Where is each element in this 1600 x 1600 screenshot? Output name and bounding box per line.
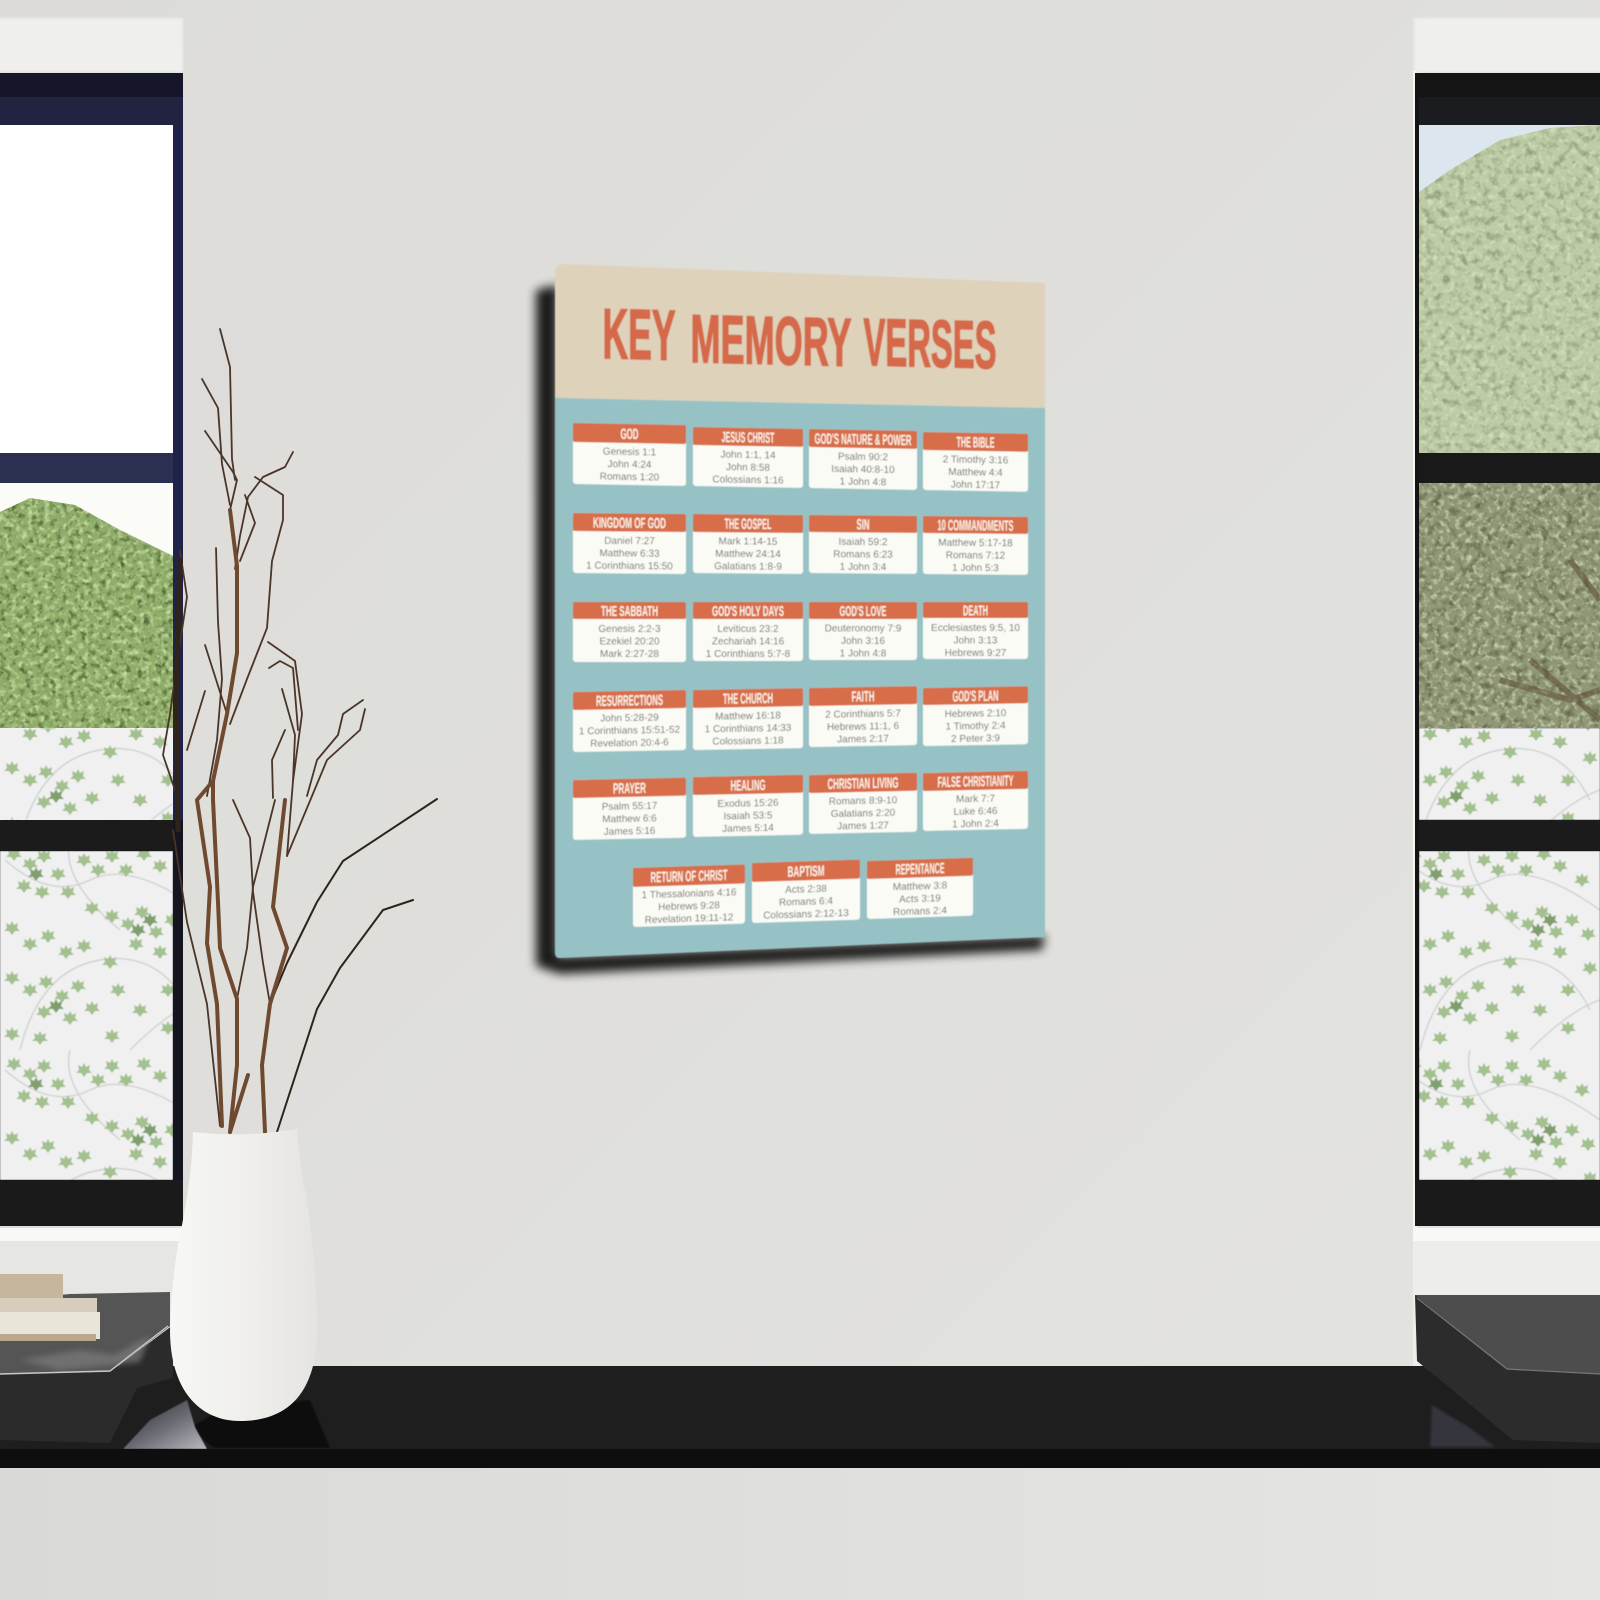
card: Jesus Christ (693, 427, 803, 488)
verses: The Sabbath: Mark 2:27-28 (600, 649, 659, 660)
heading: God's Nature and Power: GOD'S NATURE & POWER (814, 431, 912, 449)
verses: Kingdom of God: Daniel 7:27 (604, 536, 655, 547)
verses: The Church: Colossians 1:18 (712, 735, 784, 748)
verses: Prayer: Matthew 6:6 (602, 813, 657, 825)
verses: God's Nature and Power: Psalm 90:2 (838, 452, 888, 463)
verses: God: Genesis 1:1 (603, 447, 657, 458)
card: Return of Christ (633, 864, 745, 927)
card: Sin (809, 515, 917, 574)
verses: Repentance: Acts 3:19 (899, 893, 941, 905)
verses: 10 Commandments: Romans 7:12 (946, 550, 1006, 562)
verses: Resurrections: John 5:28-29 (600, 712, 659, 725)
heading: Healing: HEALING (730, 777, 766, 795)
left window (0, 18, 183, 1366)
right lower tree (1419, 483, 1600, 728)
verses: Return of Christ: 1 Thessalonians 4:16 (642, 887, 737, 901)
card: Repentance (867, 858, 973, 919)
card: False Christianity (923, 771, 1028, 831)
verses: Healing: Exodus 15:26 (717, 798, 779, 810)
verses: Death: Hebrews 9:27 (945, 648, 1007, 659)
verses: Return of Christ: Hebrews 9:28 (658, 900, 720, 913)
card: God (573, 423, 686, 486)
verses: False Christianity: Luke 6:46 (954, 806, 998, 818)
verses: God's Plan: Hebrews 2:10 (945, 708, 1007, 720)
verses: The Sabbath: Ezekiel 20:20 (599, 636, 660, 648)
card: Baptism (752, 860, 860, 923)
verses: False Christianity: Mark 7:7 (956, 793, 995, 805)
poster teal body (555, 398, 1045, 958)
white vase (170, 1129, 317, 1421)
canvas poster (555, 264, 1045, 958)
heading: Sin: SIN (856, 516, 870, 534)
verses: Faith: James 2:17 (837, 734, 889, 746)
verses: Baptism: Acts 2:38 (785, 884, 827, 896)
verses: Christian Living: Galatians 2:20 (831, 808, 896, 820)
card: The Gospel (693, 514, 803, 574)
card: God's Holy Days (693, 602, 803, 661)
heading: The Church: THE CHURCH (723, 690, 773, 708)
verses: Kingdom of God: 1 Corinthians 15:50 (586, 561, 673, 572)
right window (1413, 18, 1600, 1366)
verses: False Christianity: 1 John 2:4 (952, 818, 999, 830)
floor wall below shelf (0, 1468, 1600, 1600)
poster beige header band (555, 264, 1045, 408)
heading: The Sabbath: THE SABBATH (601, 603, 658, 620)
verses: 10 Commandments: 1 John 5:3 (952, 563, 999, 574)
heading: Kingdom of God: KINGDOM OF GOD (593, 515, 666, 532)
verses: Repentance: Romans 2:4 (893, 905, 947, 918)
verses: The Sabbath: Genesis 2:2-3 (598, 624, 661, 635)
verses: 10 Commandments: Matthew 5:17-18 (938, 538, 1013, 549)
verses: Healing: Isaiah 53:5 (724, 810, 773, 822)
title: MEMORY (690, 301, 852, 381)
left ivy upper strip (0, 728, 173, 820)
verses: God's Love: Deuteronomy 7:9 (825, 624, 902, 634)
verses: The Gospel: Matthew 24:14 (715, 549, 781, 560)
verses: Return of Christ: Revelation 19:11-12 (645, 912, 734, 926)
card: Faith (809, 686, 917, 747)
verses: God's Holy Days: Zechariah 14:16 (712, 636, 785, 648)
card: The Gospel: THE GOSPEL (725, 516, 771, 533)
card: The Bible: THE BIBLE (956, 434, 994, 452)
verses: The Bible: John 17:17 (951, 479, 1001, 491)
verses: God's Nature and Power: Isaiah 40:8-10 (831, 464, 895, 476)
card: Kingdom of God (573, 513, 686, 574)
verses: Jesus Christ: Colossians 1:16 (712, 474, 784, 487)
heading: Resurrections: RESURRECTIONS (596, 692, 663, 710)
title: KEY (602, 295, 676, 376)
card: God's Plan (923, 686, 1028, 746)
heading: Return of Christ: RETURN OF CHRIST (650, 867, 727, 886)
verses: The Gospel: Galatians 1:8-9 (714, 561, 782, 573)
right ivy upper strip (1419, 728, 1600, 820)
verses: Resurrections: 1 Corinthians 15:51-52 (579, 725, 681, 737)
card: Christian Living (809, 773, 917, 834)
verses: Jesus Christ: John 1:1, 14 (720, 449, 776, 461)
verses: The Church: Matthew 16:18 (715, 710, 781, 723)
verses: Healing: James 5:14 (722, 823, 774, 835)
verses: Christian Living: Romans 8:9-10 (829, 795, 898, 808)
heading: Faith: FAITH (851, 688, 874, 706)
right upper tree (1419, 125, 1600, 455)
verses: Prayer: Psalm 55:17 (602, 801, 658, 813)
heading: Christian Living: CHRISTIAN LIVING (828, 775, 898, 793)
heading: Prayer: PRAYER (613, 780, 646, 798)
verses: Faith: 2 Corinthians 5:7 (825, 708, 901, 721)
shelf (0, 1366, 1600, 1468)
right ivy lower pane (1419, 851, 1600, 1180)
verses: The Gospel: Mark 1:14-15 (719, 536, 778, 548)
card: God's Plan: GOD'S PLAN (952, 688, 998, 705)
verses: God's Holy Days: 1 Corinthians 5:7-8 (706, 649, 791, 660)
right pillow (1415, 1295, 1600, 1443)
card: Death: DEATH (963, 602, 988, 620)
verses: Sin: Isaiah 59:2 (839, 537, 888, 548)
card: 10 Commandments (923, 516, 1028, 575)
verses: Resurrections: Revelation 20:4-6 (590, 737, 669, 750)
verses: God's Plan: 1 Timothy 2:4 (945, 721, 1006, 733)
card: Death (923, 602, 1028, 659)
verses: Death: John 3:13 (954, 636, 998, 646)
verses: God's Plan: 2 Peter 3:9 (951, 733, 1000, 745)
heading: God: GOD (620, 426, 639, 443)
card: False Christianity: FALSE CHRISTIANITY (938, 773, 1013, 791)
verses: The Bible: 2 Timothy 3:16 (943, 454, 1009, 466)
verses: The Church: 1 Corinthians 14:33 (705, 723, 792, 735)
verses: Kingdom of God: Matthew 6:33 (599, 548, 660, 560)
verses: Faith: Hebrews 11:1, 6 (827, 721, 899, 733)
card: Resurrections (573, 690, 686, 752)
verses: Baptism: Romans 6:4 (779, 896, 833, 909)
vase shadow (195, 1400, 330, 1448)
verses: God: Romans 1:20 (600, 471, 660, 484)
verses: Baptism: Colossians 2:12-13 (763, 908, 849, 922)
card: Healing (693, 775, 803, 837)
left pillow and books (0, 1274, 173, 1443)
verses: Jesus Christ: John 8:58 (726, 462, 770, 474)
canvas poster: VERSES (864, 305, 996, 383)
card: The Sabbath (573, 602, 686, 662)
verses: God: John 4:24 (608, 459, 652, 471)
poster shadow (536, 285, 1045, 974)
verses: God's Holy Days: Leviticus 23:2 (717, 624, 779, 635)
card: Repentance: REPENTANCE (895, 860, 945, 879)
verses: Sin: 1 John 3:4 (840, 562, 887, 573)
card: Prayer (573, 778, 686, 840)
card: The Bible (923, 432, 1028, 492)
left tree (0, 490, 173, 730)
card: God's Nature and Power (809, 429, 917, 490)
verses: God's Love: 1 John 4:8 (840, 648, 887, 660)
verses: Death: Ecclesiastes 9:5, 10 (931, 623, 1020, 634)
verses: Christian Living: James 1:27 (837, 820, 889, 832)
heading: God's Holy Days: GOD'S HOLY DAYS (712, 603, 784, 620)
verses: Prayer: James 5:16 (604, 826, 656, 838)
card: Jesus Christ: JESUS CHRIST (721, 429, 774, 447)
dried branches (163, 329, 437, 1132)
left ivy lower pane (0, 851, 173, 1180)
verses: The Bible: Matthew 4:4 (948, 467, 1003, 479)
verses: God's Love: John 3:16 (841, 636, 885, 647)
verses: Repentance: Matthew 3:8 (893, 880, 948, 893)
verses: Sin: Romans 6:23 (833, 549, 893, 561)
card: God's Love (809, 602, 917, 660)
heading: God's Love: GOD'S LOVE (840, 603, 886, 620)
heading: Baptism: BAPTISM (788, 863, 824, 881)
card: The Church (693, 688, 803, 750)
verses: God's Nature and Power: 1 John 4:8 (840, 477, 887, 488)
card: 10 Commandments: 10 COMMANDMENTS (937, 517, 1013, 535)
